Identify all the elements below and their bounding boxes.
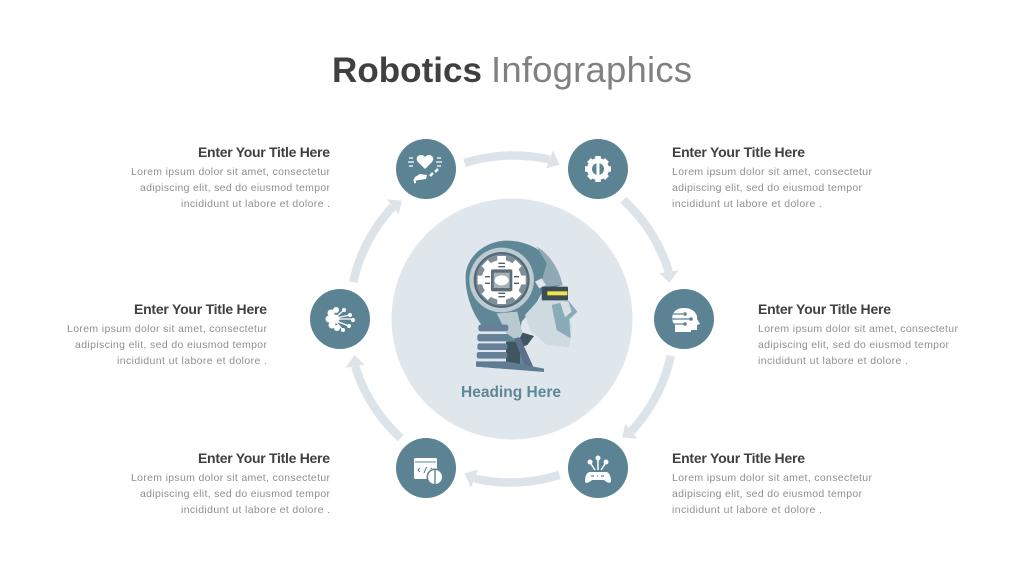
robot head illustration	[466, 241, 577, 372]
icon: gear	[568, 139, 628, 199]
text block: bottom left: Enter Your Title Here	[198, 450, 330, 466]
text block: top right: Enter Your Title Here	[672, 144, 805, 160]
text block: bottom left	[131, 450, 330, 516]
text block: middle left: adipiscing elit, sed do eiusmod tempor	[75, 339, 268, 351]
text block: middle left	[67, 301, 268, 367]
arrow: lower left	[342, 353, 405, 444]
icon: neural brain	[310, 289, 370, 349]
text block: bottom left: adipiscing elit, sed do eiusmod tempor	[140, 488, 330, 500]
title: Robotics	[332, 51, 482, 90]
icon: heart and hand	[396, 139, 456, 199]
text block: middle right: Enter Your Title Here	[758, 301, 891, 317]
text block: top right: adipiscing elit, sed do eiusmod tempor	[672, 182, 862, 194]
text block: middle right: Lorem ipsum dolor sit amet, consectetur	[758, 323, 958, 335]
text block: top left	[131, 144, 330, 210]
icon: head with circuits	[654, 289, 714, 349]
text block: bottom right: Lorem ipsum dolor sit amet, consectetur	[672, 472, 872, 484]
text block: top left: incididunt ut labore et dolore .	[181, 198, 330, 210]
text block: middle left: incididunt ut labore et dolore .	[117, 355, 267, 367]
text block: bottom left: incididunt ut labore et dolore .	[181, 504, 330, 516]
text block: bottom right: Enter Your Title Here	[672, 450, 805, 466]
title: Infographics	[491, 49, 692, 90]
text block: top left: Enter Your Title Here	[198, 144, 330, 160]
arrow: top	[464, 150, 560, 168]
text block: top right	[672, 144, 872, 210]
center heading: Heading Here	[461, 384, 561, 401]
arrow: bottom	[464, 470, 560, 488]
title	[332, 49, 692, 90]
text block: top left: adipiscing elit, sed do eiusmod tempor	[140, 182, 330, 194]
text block: top left: Lorem ipsum dolor sit amet, consectetur	[131, 166, 330, 178]
text block: middle left: Enter Your Title Here	[134, 301, 267, 317]
text block: bottom right: adipiscing elit, sed do eiusmod tempor	[672, 488, 862, 500]
arrow: upper left	[342, 194, 405, 285]
icon: browser code and pill	[396, 438, 456, 498]
central circle	[392, 198, 632, 440]
text block: middle right: incididunt ut labore et dolore .	[758, 355, 908, 367]
text block: middle left: Lorem ipsum dolor sit amet, consectetur	[67, 323, 268, 335]
icon: game controller	[568, 438, 628, 498]
text block: middle right	[758, 301, 958, 367]
text block: bottom right: incididunt ut labore et dolore .	[672, 504, 822, 516]
text block: bottom left: Lorem ipsum dolor sit amet, consectetur	[131, 472, 330, 484]
text block: middle right: adipiscing elit, sed do eiusmod tempor	[758, 339, 950, 351]
arrow: upper right	[619, 194, 682, 285]
arrow: lower right	[619, 353, 682, 444]
text block: top right: Lorem ipsum dolor sit amet, consectetur	[672, 166, 872, 178]
text block: top right: incididunt ut labore et dolore .	[672, 198, 822, 210]
text block: bottom right	[672, 450, 872, 516]
